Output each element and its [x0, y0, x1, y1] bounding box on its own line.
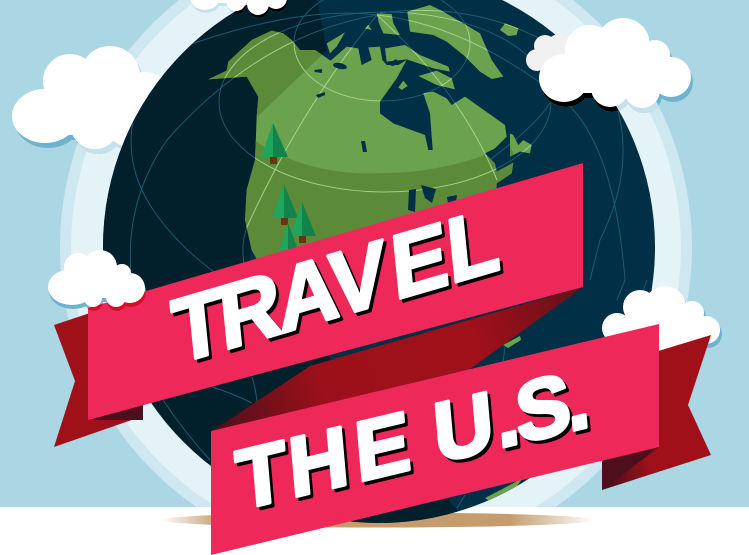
cloud: upper right: [526, 18, 693, 113]
ground shadow: [160, 512, 596, 528]
land shade: south arc: [245, 142, 514, 258]
ocean shade: [90, 0, 457, 530]
tree: right: [290, 202, 316, 243]
ribbon: top: [54, 163, 583, 447]
ribbon body bottom: [211, 324, 659, 555]
ocean: [100, 0, 660, 530]
ribbon connector fold: [212, 287, 583, 431]
ribbon: bottom: [211, 324, 711, 555]
title word: travel: TRAVEL: [168, 188, 504, 383]
cloud: on top ribbon: [48, 250, 146, 311]
ribbon tail fold left: [88, 405, 143, 420]
ground: [0, 507, 749, 555]
cloud: top centre: [189, 0, 288, 18]
ribbon tail fold right: [602, 447, 659, 490]
land shade: north-west: [208, 30, 322, 117]
ribbon body top: [88, 163, 583, 420]
far land fragments: [485, 336, 523, 505]
ribbon tail right: [602, 335, 711, 490]
title words: the u.s.: THE U.S.: [232, 350, 593, 528]
cloud: behind lower ribbon: [602, 286, 722, 359]
title word: travel: TRAVEL: [171, 191, 507, 386]
ribbon tail left: [54, 313, 143, 447]
grid lines on land: [224, 10, 532, 229]
title words: the u.s.: THE U.S.: [235, 353, 596, 531]
grid lines on ocean: [120, 0, 647, 508]
cloud: upper left: [12, 46, 176, 154]
globe: [90, 0, 660, 530]
tree: lower: [279, 223, 298, 250]
tree: middle: [272, 184, 298, 225]
land: [208, 5, 532, 259]
tree: upper: [261, 123, 288, 164]
lakes and inlets: [314, 59, 457, 212]
